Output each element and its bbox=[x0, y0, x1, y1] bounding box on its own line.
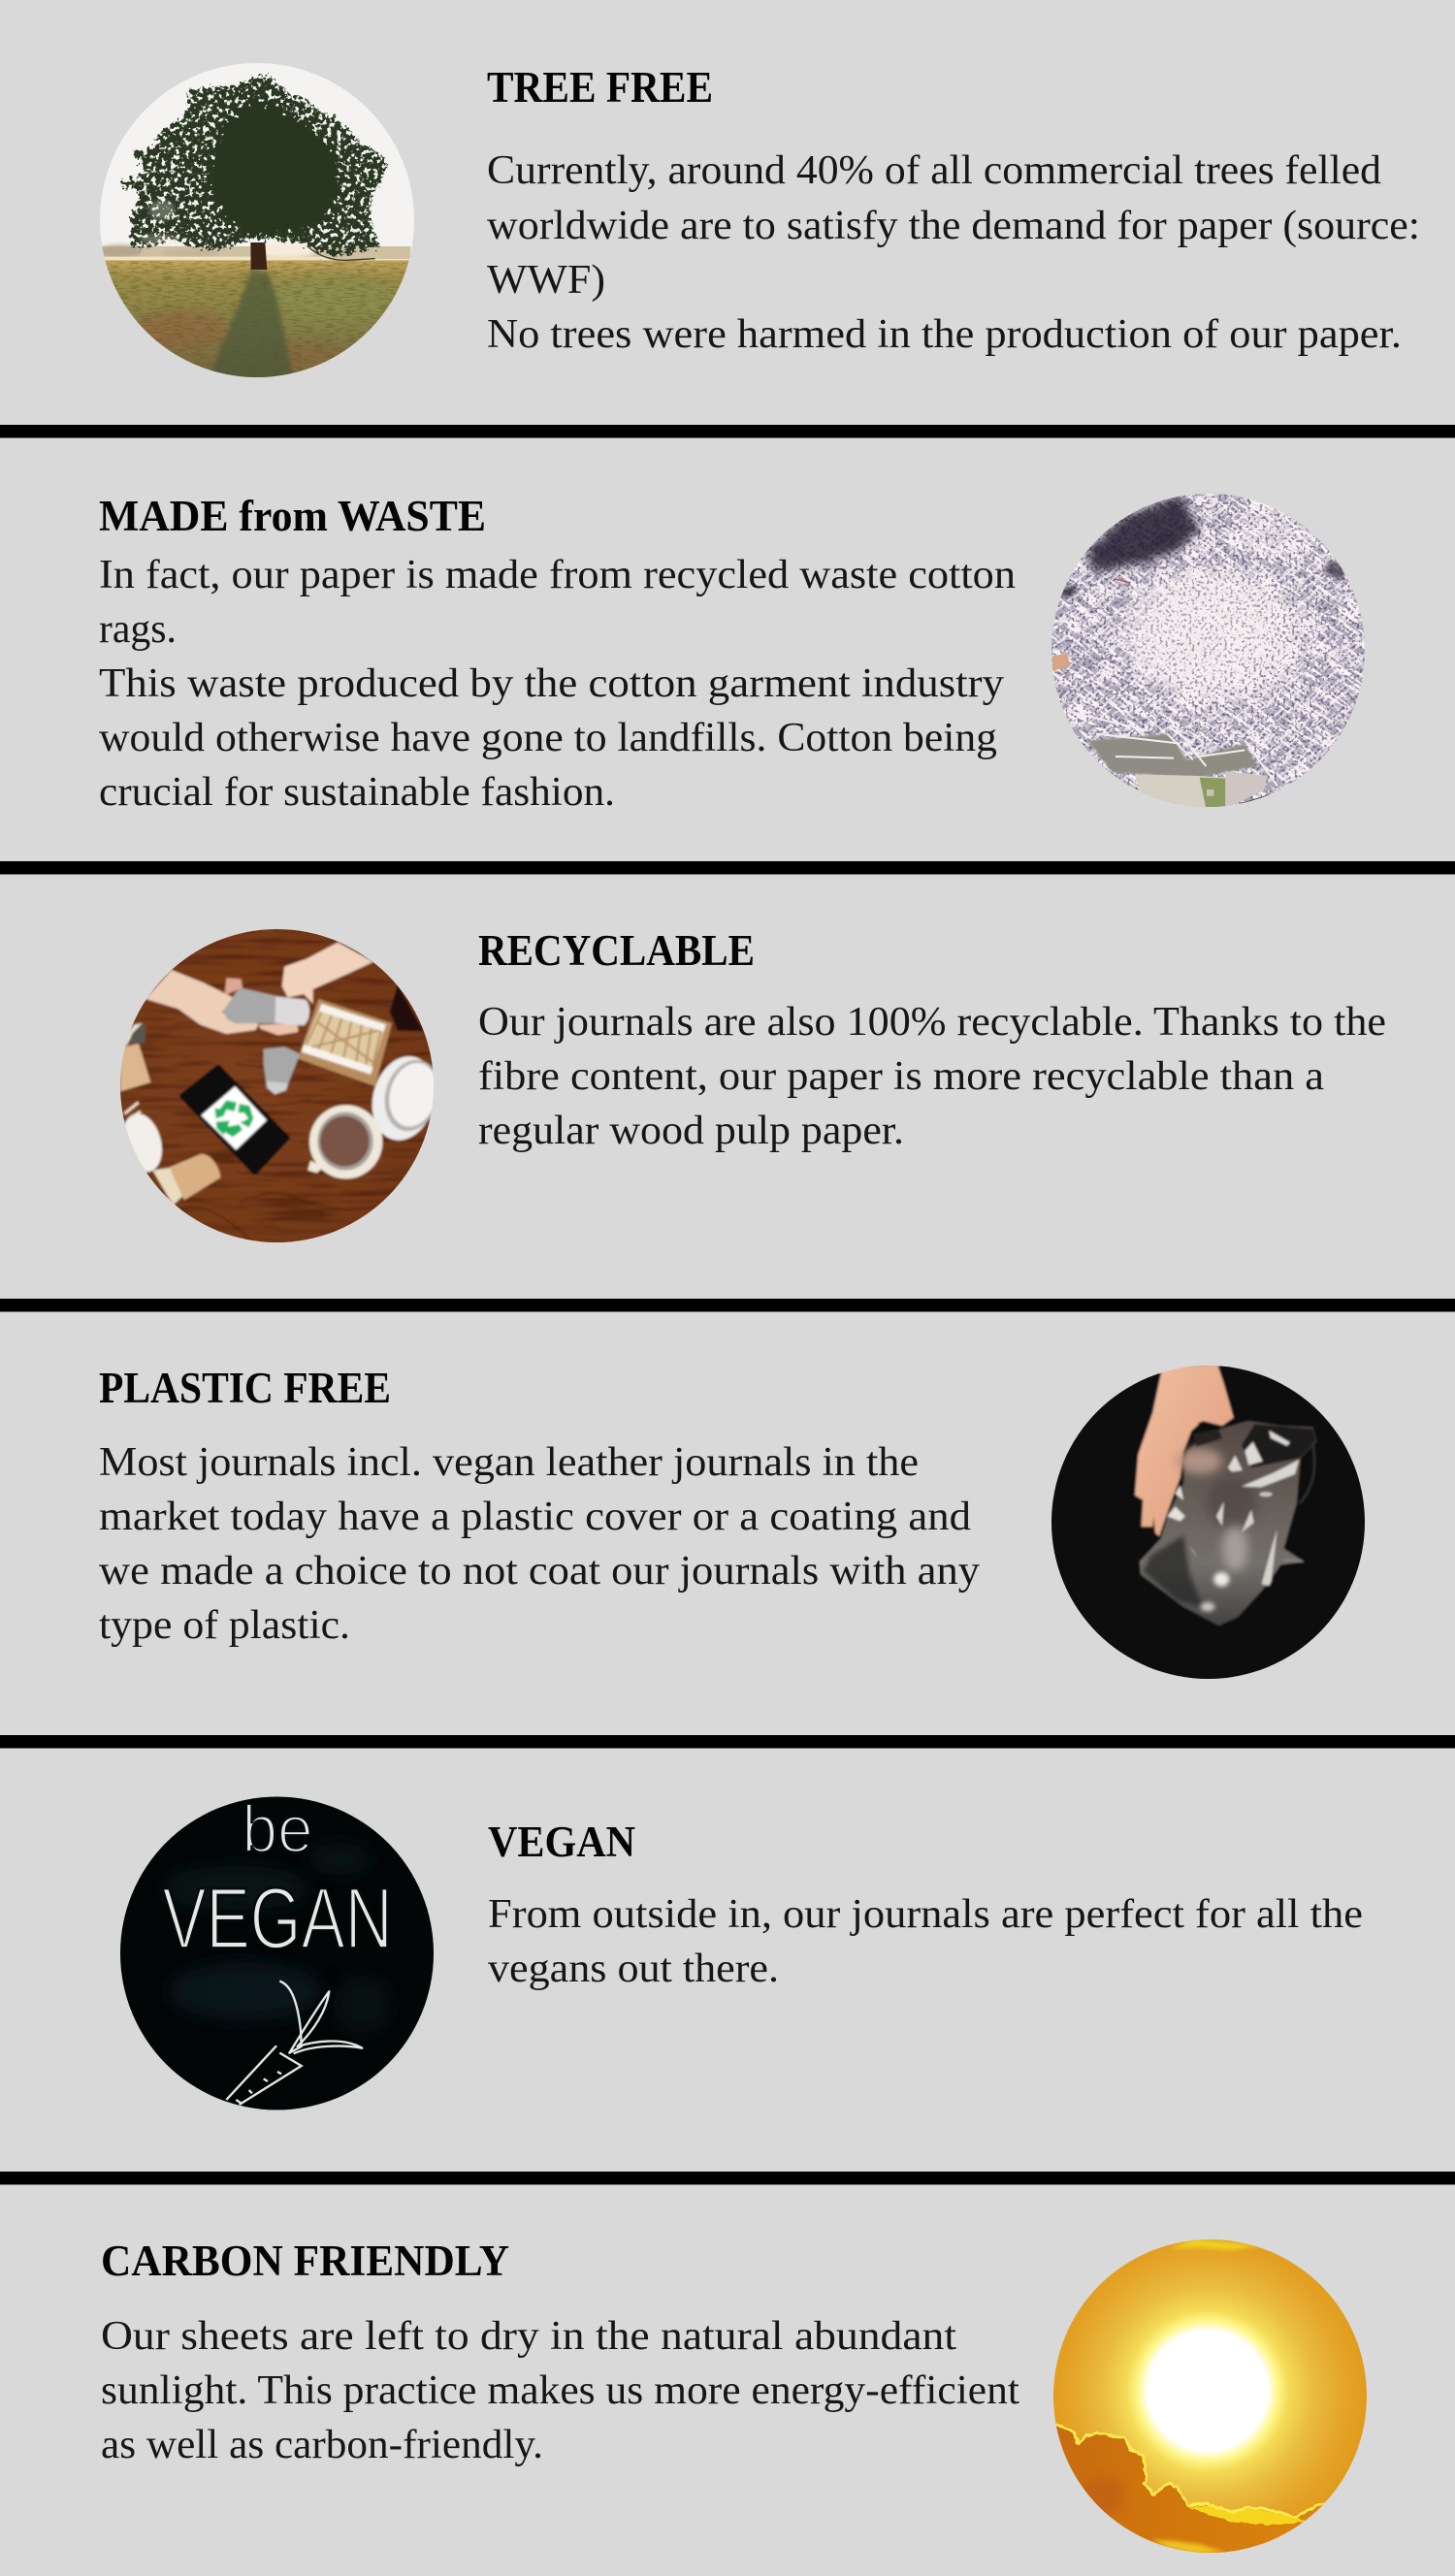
body text bbox=[478, 1000, 1386, 1153]
panel: carbon friendly bbox=[101, 2234, 1377, 2576]
body text: regular wood pulp paper. bbox=[478, 1109, 904, 1153]
photo: shredded paper pile bbox=[1051, 494, 1365, 807]
heading: VEGAN bbox=[488, 1818, 635, 1866]
body text bbox=[99, 1440, 980, 1648]
body text: crucial for sustainable fashion. bbox=[99, 770, 615, 815]
body text: worldwide are to satisfy the demand for paper (source: bbox=[487, 204, 1420, 248]
body text: would otherwise have gone to landfills. Cotton being bbox=[99, 716, 997, 760]
panel: recyclable bbox=[116, 924, 1386, 1248]
body text: we made a choice to not coat our journals with any bbox=[99, 1549, 980, 1594]
heading: MADE from WASTE bbox=[99, 492, 486, 540]
body text: rags. bbox=[99, 607, 177, 652]
body text: WWF) bbox=[487, 258, 605, 303]
body text: vegans out there. bbox=[488, 1947, 779, 1991]
body text: Our journals are also 100% recyclable. Thanks to the bbox=[478, 1000, 1386, 1045]
body text: No trees were harmed in the production of our paper. bbox=[487, 312, 1402, 357]
photo: hand holding a plastic bag bbox=[1048, 1361, 1371, 1685]
body text: Most journals incl. vegan leather journals in the bbox=[99, 1440, 919, 1485]
body text: as well as carbon-friendly. bbox=[101, 2423, 543, 2467]
body text bbox=[99, 553, 1016, 815]
body text bbox=[101, 2314, 1019, 2467]
body text: This waste produced by the cotton garment industry bbox=[99, 661, 1004, 706]
body text: Currently, around 40% of all commercial trees felled bbox=[487, 148, 1381, 193]
panel: vegan bbox=[116, 1792, 1363, 2117]
body text: fibre content, our paper is more recyclable than a bbox=[478, 1054, 1324, 1099]
chalkboard graphic: be VEGAN with carrot: be bbox=[242, 1792, 313, 1866]
recycling symbol on phone bbox=[201, 1086, 267, 1150]
panel: plastic free bbox=[99, 1361, 1371, 1685]
photo: bright sun behind a cloud bbox=[1053, 2239, 1367, 2553]
panel: tree free bbox=[100, 63, 1416, 377]
chalkboard graphic: be VEGAN with carrot bbox=[116, 1792, 439, 2117]
body text: type of plastic. bbox=[99, 1603, 350, 1648]
heading: TREE FREE bbox=[487, 63, 713, 112]
body text: market today have a plastic cover or a coating and bbox=[99, 1495, 971, 1539]
body text: From outside in, our journals are perfect for all the bbox=[488, 1892, 1363, 1937]
photo: zero-waste items on wood table bbox=[116, 924, 447, 1248]
chalkboard graphic: be VEGAN with carrot: VEGAN bbox=[162, 1869, 393, 1966]
heading: CARBON FRIENDLY bbox=[101, 2237, 509, 2285]
heading: PLASTIC FREE bbox=[99, 1364, 391, 1412]
body text: Our sheets are left to dry in the natural abundant bbox=[101, 2314, 956, 2359]
body text: In fact, our paper is made from recycled waste cotton bbox=[99, 553, 1016, 597]
heading: RECYCLABLE bbox=[478, 926, 755, 975]
body text bbox=[487, 148, 1420, 357]
body text bbox=[488, 1892, 1363, 1991]
body text: sunlight. This practice makes us more energy-efficient bbox=[101, 2368, 1019, 2413]
panel: made from waste bbox=[99, 494, 1365, 807]
photo: lone tree in a field bbox=[100, 63, 414, 377]
